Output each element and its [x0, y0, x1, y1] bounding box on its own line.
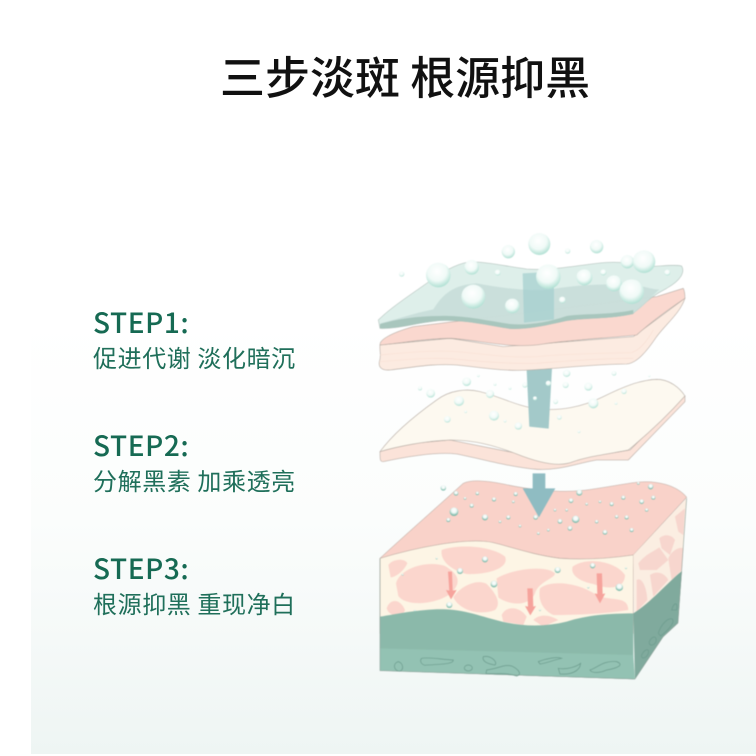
layer: skin block [380, 481, 687, 679]
title: 三步淡斑 根源抑黑 [220, 42, 590, 107]
step 2 text: 分解黑素 加乘透亮 [93, 462, 296, 497]
side face cells [637, 508, 685, 612]
step 1 text: 促进代谢 淡化暗沉 [93, 339, 296, 374]
block teal base [380, 609, 633, 679]
step 2 text [93, 425, 296, 497]
tiny bubbles on block [402, 482, 655, 612]
arrow: upper shaft [527, 368, 552, 429]
skin cells [387, 547, 628, 627]
step 3 text: STEP3: [93, 548, 189, 588]
step 3 text: 根源抑黑 重现净白 [93, 585, 296, 620]
block right side [633, 498, 687, 679]
layer: middle cream sheet [380, 379, 685, 469]
dermis outlines [394, 604, 677, 676]
step 1 text [93, 302, 296, 374]
step 1 text: STEP1: [93, 302, 189, 342]
block front cream [380, 541, 633, 633]
block top surface [380, 481, 687, 559]
step 2 text: STEP2: [93, 425, 189, 465]
step 3 text [93, 548, 296, 620]
red arrows [446, 572, 605, 615]
bubbles [399, 233, 670, 433]
arrow: lower shaft and head [523, 473, 555, 517]
layer: teal top film [378, 262, 683, 329]
layer: pink upper sheet [379, 288, 685, 370]
